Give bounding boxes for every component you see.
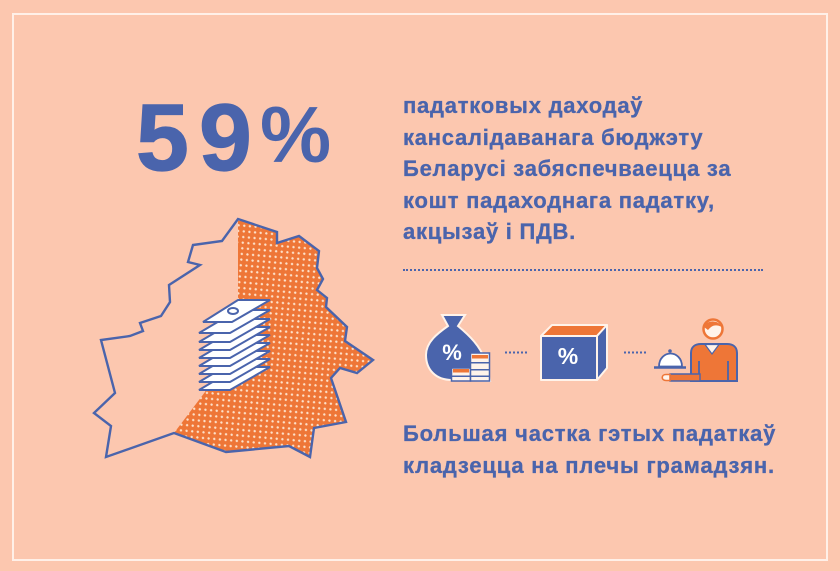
coins — [452, 368, 470, 381]
icon: money bag with percent — [426, 315, 490, 381]
text block: tax revenue description: падатковых даходаў — [403, 93, 643, 118]
percent sign: % — [442, 340, 462, 365]
cloche — [659, 354, 682, 366]
text block: burden on citizens: Большая частка гэтых падаткаў — [403, 421, 776, 446]
text block: burden on citizens: кладзецца на плечы грамадзян. — [403, 453, 775, 478]
dotted connector 2 — [624, 352, 648, 354]
big number: 59%: 9 — [199, 85, 252, 191]
map: shaded 59% area — [174, 219, 373, 457]
head — [704, 320, 722, 338]
icon: stack of documents — [199, 300, 270, 390]
text block: tax revenue description: кошт падаходнага падатку, — [403, 188, 715, 213]
icon: waiter with cloche — [654, 320, 737, 381]
text block: tax revenue description: кансалідаванага бюджэту — [403, 125, 703, 150]
text block: tax revenue description: Беларусі забяспечваецца за — [403, 156, 731, 181]
icon: box with percent — [541, 325, 607, 380]
text block: tax revenue description — [403, 93, 731, 244]
map: outline — [94, 219, 373, 457]
arm — [670, 374, 700, 381]
dotted divider — [403, 269, 763, 271]
big number: 59%: % — [260, 90, 331, 179]
text block: burden on citizens — [403, 421, 776, 478]
big number: 59%: 5 — [136, 85, 189, 191]
percent sign: % — [558, 343, 578, 369]
big number: 59% — [136, 85, 331, 191]
dotted connector 1 — [505, 352, 529, 354]
map of Belarus — [94, 219, 373, 457]
text block: tax revenue description: акцызаў і ПДВ. — [403, 219, 576, 244]
body — [691, 344, 737, 381]
hand — [662, 374, 670, 380]
